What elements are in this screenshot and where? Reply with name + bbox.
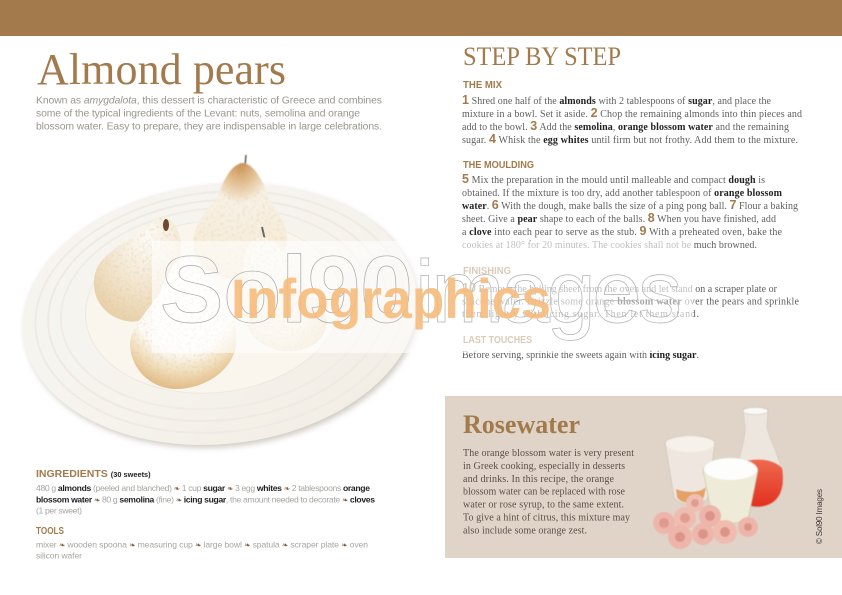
illustration: bottle, glasses and roses (653, 408, 783, 549)
almond pear: left (94, 217, 181, 322)
steps 5 to 9: sheet. Give a pear shape to each of the balls. 8 When you have finished, add (462, 211, 776, 225)
rosewater text: in Greek cooking, especially in desserts (463, 461, 625, 472)
ingredients list (36, 483, 375, 516)
bottle (735, 408, 783, 507)
panel: ingredients and tools (36, 468, 375, 560)
copyright credit: © Sol90 Images (815, 489, 824, 544)
subheading: FINISHING (463, 265, 511, 277)
almond pear: right (243, 227, 327, 351)
final instruction: Before serving, sprinkle the sweets again with icing sugar. (462, 350, 699, 361)
intro text: blossom water. Easy to prepare, they are indispensable in large celebrations. (36, 122, 382, 132)
intro text (36, 96, 382, 132)
steps 1 to 4: 1 Shred one half of the almonds with 2 tablespoons of sugar, and place the (462, 93, 772, 107)
almond pear: front (130, 257, 236, 389)
heading: step by step: STEP BY STEP (463, 42, 621, 71)
steps 5 to 9: water. 6 With the dough, make balls the size of a ping pong ball. 7 Flour a baking (462, 198, 798, 212)
tools list: mixer ❧ wooden spoona ❧ measuring cup ❧ large bowl ❧ spatula ❧ scraper plate ❧ oven (36, 540, 368, 550)
steps 1 to 4: sugar. 4 Whisk the egg whites until firm but not frothy. Add them to the mixture. (462, 132, 798, 146)
rosewater text: blossom water can be replaced with rose (463, 486, 626, 498)
ingredients list: (1 per sweet) (36, 506, 82, 516)
tools list: silicon wafer (36, 550, 82, 560)
subheading: THE MIX (463, 79, 502, 91)
intro text: Known as amygdalota, this dessert is characteristic of Greece and combines (36, 96, 382, 106)
section: last touches (462, 334, 699, 361)
panel: rosewater (445, 396, 842, 558)
steps 5 to 9: 5 Mix the preparation in the mould until malleable and compact dough is (462, 172, 765, 186)
step 10: them lightly with icing sugar. Then let them stand. (462, 309, 699, 320)
intro text: some of the typical ingredients of the Levant: nuts, semolina and orange (36, 108, 360, 120)
section: the mix (462, 79, 802, 146)
watermark: Infographics: Infographics (231, 267, 551, 330)
heading: rosewater: Rosewater (463, 410, 580, 439)
heading: ingredients: INGREDIENTS (30 sweets) (36, 468, 151, 480)
section: the moulding (462, 159, 798, 251)
glass: right (703, 458, 758, 523)
rosewater text: and drinks. In this recipe, the orange (463, 474, 615, 485)
steps 1 to 4 (462, 93, 802, 146)
section: finishing (462, 265, 800, 320)
ingredients list: blossom water ❧ 80 g semolina (fine) ❧ icing sugar, the amount needed to decorate ❧ cloves (36, 494, 375, 504)
photo: plate of almond pears (9, 155, 433, 467)
title: Almond pears (37, 45, 286, 94)
steps 5 to 9: a clove into each pear to serve as the stub. 9 With a preheated oven, bake the (462, 224, 783, 238)
heading: tools: TOOLS (36, 525, 64, 537)
step 10: 10 Remove the baking sheet from the oven and let stand on a scraper plate or (462, 281, 778, 295)
top band (0, 0, 842, 36)
rosewater text: To give a hint of citrus, this mixture may (463, 512, 630, 524)
clove stem: left pear (163, 219, 169, 231)
step 10: silicone wafer. Drizzle some orange blossom water over the pears and sprinkle (462, 296, 800, 308)
steps 1 to 4: mixture in a bowl. Set it aside. 2 Chop the remaining almonds into thin pieces and (462, 106, 802, 120)
steps 5 to 9 (462, 172, 798, 251)
watermark: Sol90: Sol90 (160, 237, 413, 343)
rosewater text: The orange blossom water is very present (463, 448, 634, 459)
steps 5 to 9: cookies at 180° for 20 minutes. The cookies shall not be much browned. (462, 240, 757, 251)
watermark (152, 237, 693, 353)
glass: left (665, 436, 715, 504)
rosewater text: also include some orange zest. (463, 526, 587, 536)
subheading: LAST TOUCHES (463, 334, 532, 346)
rosewater text (463, 448, 634, 536)
steps 5 to 9: obtained. If the mixture is too dry, add another tablespoon of orange blossom (462, 188, 783, 199)
step 10 (462, 281, 800, 320)
plate (9, 164, 433, 467)
subheading: THE MOULDING (463, 159, 534, 171)
rosewater text: water or rose syrup, to the same extent. (463, 500, 624, 510)
roses (653, 494, 758, 549)
ingredients list: 480 g almonds (peeled and blanched) ❧ 1 cup sugar ❧ 3 egg whites ❧ 2 tablespoons orange (36, 483, 370, 493)
almond pear: back (193, 155, 287, 279)
watermark: images: images (415, 242, 682, 341)
tools list (36, 540, 368, 560)
steps 1 to 4: add to the bowl. 3 Add the semolina, orange blossom water and the remaining (462, 119, 789, 133)
